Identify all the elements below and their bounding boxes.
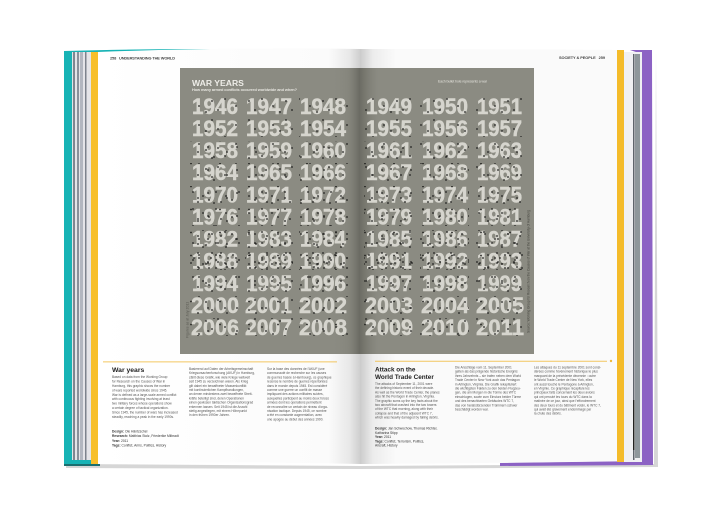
- text block: Attack French: [534, 366, 601, 416]
- text block: War years German: seit 1945 zu verzeichnen waren. Als Krieg: [189, 380, 248, 384]
- year numerals: 1995: [246, 271, 292, 296]
- text block: War years French: Sur la base des données de l'AKUF (une: [267, 367, 325, 371]
- text block: Attack English: The graphic sums up the key facts about the: [375, 399, 438, 403]
- year numerals: 1985: [366, 226, 412, 252]
- text block: Attack German: in Arlington, Virginia. Die Grafik rekapituliert: [455, 382, 517, 386]
- text block: Attack French: qui avait été gravement endommagé par: [534, 408, 592, 412]
- text block: War years German: erkennen lassen. Seit 1945 ist die Anzahl: [189, 405, 248, 409]
- text block: Attack heading: [375, 366, 434, 381]
- text block: War years French: comme une guerre un conflit de masse: [267, 388, 322, 392]
- year numerals: 1981: [477, 204, 522, 230]
- year numerals: 1948: [300, 94, 346, 119]
- text block: Attack French: ont aussi touché le Pentagone à Arlington,: [534, 382, 594, 386]
- poster title: WAR YEARS: [192, 78, 244, 88]
- year numerals: 1982: [192, 226, 238, 252]
- year numerals: 1949: [366, 94, 412, 119]
- text block: Attack German: und des benachbarten Gebäudes WTC 7,: [455, 399, 514, 403]
- text block: Attack English: As well as the World Trade Center, the planes: [375, 390, 440, 394]
- credits: War years: Year: 2011: [112, 439, 128, 443]
- text block: War years French: armées dont les opérations permettent: [267, 401, 322, 405]
- year numerals: 1998: [422, 271, 468, 296]
- year numerals: 1980: [422, 204, 468, 230]
- right cover edge (purple): [500, 50, 653, 466]
- text block: War years English: Since 1945, the number of wars has increased: [112, 410, 178, 414]
- year numerals: 1984: [300, 226, 346, 252]
- year numerals: 1954: [300, 116, 346, 141]
- text block: Attack English: [375, 382, 440, 420]
- year numerals: 1971: [246, 182, 292, 208]
- year numerals: 1967: [366, 160, 412, 185]
- text block: War years English: for Research on the Causes of War in: [112, 380, 165, 384]
- text block: War years English: War is defined as a large-scale armed conflict: [112, 393, 176, 397]
- text block: Attack German: Die Anschläge vom 11. September 2001: [455, 366, 512, 370]
- text block: Attack French: le World Trade Center de New York, elles: [534, 378, 593, 382]
- year numerals: 2007: [245, 315, 292, 340]
- year numerals: 1992: [422, 248, 468, 274]
- yellow page edge left: [91, 52, 98, 464]
- year numerals: 1956: [422, 116, 468, 141]
- year numerals: 1960: [300, 138, 346, 163]
- text block: War years French: recense le nombre de guerres répertoriées: [267, 380, 328, 384]
- text block: War years French: nisation tactique. Depuis 1945, ce nombre: [267, 409, 327, 413]
- year numerals: 1991: [366, 248, 412, 274]
- text block: Attack English: of the WTC that morning, along with their: [375, 407, 434, 411]
- text block: Attack German: einschlugen, sowie zum Einsturz beider Türme: [455, 395, 521, 399]
- text block: War years English: two military forces whose operations show: [112, 402, 172, 406]
- year numerals: 1989: [246, 248, 292, 274]
- left running head: 258 UNDERSTANDING THE WORLD: [110, 56, 175, 60]
- divider left: [103, 360, 337, 363]
- year numerals: 1958: [192, 138, 238, 163]
- text block: Attack French: la chute des débris.: [534, 412, 562, 416]
- year numerals: 1959: [246, 138, 292, 163]
- text block: War years English: steadily, reaching a peak in the early 1990s.: [112, 415, 174, 419]
- year numerals: 1962: [422, 138, 468, 163]
- text block: War years English: [112, 375, 178, 419]
- text block: War years French: impliquant des actions militaires suivies,: [267, 392, 324, 396]
- text block: Attack heading: World Trade Center: [375, 374, 434, 381]
- credits: Attack: Katharina Stipp: [375, 431, 398, 435]
- year numerals: 1957: [477, 116, 522, 141]
- text block: Attack French: marquant de la précédente décennie : outre: [534, 374, 596, 378]
- credits: Attack: Aircraft, History: [375, 444, 398, 448]
- year numerals: 1986: [422, 226, 468, 252]
- poster subtitle: How many armed conflicts occurred worldwide and when?: [192, 87, 298, 92]
- text block: Attack English: collapse and that of the adjacent WTC 7,: [375, 411, 433, 415]
- text block: War years English: of wars reported worldwide since 1945.: [112, 388, 167, 392]
- year numerals: 1965: [246, 160, 292, 185]
- year numerals: 1963: [477, 138, 522, 163]
- year numerals: 2006: [191, 315, 239, 340]
- year numerals: 1983: [246, 226, 292, 252]
- text block: War years French: [267, 367, 332, 421]
- text block: Attack English: also hit the Pentagon in Arlington, Virginia.: [375, 395, 435, 399]
- text block: Attack French: Les attaques du 11 septembre 2001 sont consi-: [534, 366, 601, 370]
- year numerals: 1988: [192, 248, 238, 274]
- year numerals: 1970: [192, 182, 238, 208]
- text block: War years French: de reconnaître un certain de niveau d'orga-: [267, 405, 328, 409]
- credits: War years: Tags: Conflict, Arms, Politics, History: [112, 444, 167, 448]
- source note: Source: Working Group for Research on the Causes of War at the University of Hamburg: [526, 210, 530, 333]
- text block: Attack English: the defining historic event of their decade.: [375, 386, 434, 390]
- text block: Attack English: The attacks of September 11, 2001 were: [375, 382, 433, 386]
- year numerals: 1973: [366, 182, 412, 208]
- year numerals: 1976: [192, 204, 238, 230]
- book shadow: [66, 52, 658, 469]
- year numerals: 1955: [366, 116, 412, 141]
- year numerals: 1997: [366, 271, 412, 296]
- year numerals: 1951: [477, 94, 522, 119]
- year numerals: 1964: [192, 160, 238, 185]
- text block: War years German: stetig angestiegen, mit einem Höhepunkt: [189, 409, 247, 413]
- text block: Attack English: which was heavily damaged by falling debris.: [375, 416, 439, 420]
- bullet holes: [190, 97, 525, 336]
- text block: Attack German: das von herabstürzenden Trümmern schwer: [455, 403, 518, 407]
- text block: Attack French: qui ont percuté les tours du WTC dans la: [534, 395, 592, 399]
- text block: War years German: kräfte beteiligt sind, deren Operationen: [189, 396, 244, 400]
- year numerals: [191, 94, 524, 340]
- right page stack: [624, 52, 642, 462]
- year numerals: 1947: [246, 94, 292, 119]
- legend note: Each bullet hole represents a war: [438, 80, 488, 84]
- right page: [360, 49, 618, 464]
- year numerals: 2003: [365, 293, 413, 318]
- text block: Attack German: die wichtigsten Fakten zu den beiden Flugzeu-: [455, 386, 521, 390]
- text block: War years German: [189, 367, 255, 417]
- year numerals: 1993: [477, 248, 522, 274]
- year numerals: 1975: [477, 182, 522, 208]
- text block: Attack French: principaux faits concernant les deux avions: [534, 391, 595, 395]
- credits: War years: Research: Matthias Stolz, Friederike Milbradt: [112, 434, 179, 438]
- year numerals: 1987: [477, 226, 522, 252]
- year numerals: 1999: [477, 271, 522, 296]
- year numerals: 2000: [191, 293, 239, 318]
- text block: War years German: einen gewissen taktischen Organisationsgrad: [189, 401, 253, 405]
- text block: War years German: mit kontinuierlichen Kampfhandlungen,: [189, 388, 244, 392]
- right running head: SOCIETY & PEOPLE 259: [559, 55, 606, 60]
- year numerals: 2004: [421, 293, 469, 318]
- text block: War years French: une apogée au début des années 1990.: [267, 417, 323, 421]
- text block: Attack German: ihres Jahrzehnts – sie trafen neben dem World: [455, 374, 521, 378]
- text block: War years German: Basierend auf Daten der Arbeitsgemeinschaft: [189, 367, 253, 371]
- text block: Attack German: gelten als das prägende historische Ereignis: [455, 370, 518, 374]
- left page stack: [72, 52, 91, 460]
- text block: War years German: gilt dabei ein bewaffneter Massenkonflikt: [189, 384, 246, 388]
- text block: War years English: with continuous fighting involving at least: [112, 397, 170, 401]
- year numerals: 1968: [422, 160, 468, 185]
- text block: War years French: dans le monde depuis 1945. Est considéré: [267, 384, 327, 388]
- yellow page edge right: [617, 50, 624, 462]
- year numerals: 1953: [246, 116, 292, 141]
- year numerals: 2001: [245, 293, 292, 318]
- year numerals: 1966: [300, 160, 346, 185]
- panel: war years poster: [180, 68, 534, 354]
- text block: War years English: Hamburg, this graphic shows the number: [112, 384, 171, 388]
- credits: Attack: Year: 2011: [375, 435, 391, 439]
- credits: Attack: [375, 426, 438, 448]
- year numerals: 1977: [246, 204, 292, 230]
- text block: War years French: auxquelles participent au moins deux forces: [267, 396, 329, 400]
- year numerals: 2002: [299, 293, 347, 318]
- left page: [97, 48, 360, 464]
- year numerals: 1974: [422, 182, 468, 208]
- year numerals: 1990: [300, 248, 346, 274]
- year numerals: 2010: [421, 315, 469, 340]
- year numerals: 1961: [366, 138, 412, 163]
- year numerals: 1946: [192, 94, 238, 119]
- credits: War years: [112, 430, 179, 448]
- year numerals: 1972: [300, 182, 346, 208]
- credits: Attack: Design: Jan Schwochow, Thomas Richter,: [375, 426, 438, 430]
- text block: Attack French: matinée de ce jour, ainsi que l'effondrement: [534, 399, 596, 403]
- text block: War years German: zählt diese Grafik, wie viele Kriege weltweit: [189, 375, 250, 379]
- text block: Attack German: gen, die am Morgen in die Türme des WTC: [455, 391, 517, 395]
- text block: War years German: in den frühen 1990er Jahren.: [189, 413, 230, 417]
- year numerals: 1952: [192, 116, 238, 141]
- text block: War years French: communauté de recherche sur les causes: [267, 371, 327, 375]
- credits: Attack: Tags: Conflict, Terrorism, Politics,: [375, 439, 424, 443]
- text block: Attack English: two aircraft that crashed into the two towers: [375, 403, 437, 407]
- text block: War years English: Based on data from the Working Group: [112, 375, 168, 379]
- text block: War years heading: War years: [112, 367, 144, 374]
- year numerals: 1950: [422, 94, 468, 119]
- text block: Attack French: dérées comme l'événement historique le plus: [534, 370, 598, 374]
- year numerals: 2005: [476, 293, 524, 318]
- divider right: [375, 360, 612, 362]
- text block: Attack German: Trade Center in New York auch das Pentagon: [455, 378, 520, 382]
- text block: Attack French: des deux tours et du bâtiment voisin, le WTC 7,: [534, 403, 601, 407]
- date note: Figures as at July 2011: [186, 302, 190, 338]
- year numerals: 1979: [366, 204, 412, 230]
- text block: War years French: de guerres basée à Hambourg), ce graphique: [267, 375, 332, 379]
- year numerals: 1994: [192, 271, 238, 296]
- left cover edge (teal): [64, 49, 210, 466]
- credits: War years: Design: Ole Häntzschel: [112, 430, 148, 434]
- text block: War years German: Kriegsursachenforschung (AKUF) in Hamburg,: [189, 371, 255, 375]
- year numerals: 1978: [300, 204, 346, 230]
- text block: Attack heading: Attack on the: [375, 366, 416, 374]
- text block: Attack German: beschädigt worden war.: [455, 408, 489, 412]
- year numerals: 1969: [477, 160, 522, 185]
- text block: Attack French: en Virginie. Ce graphique récapitule les: [534, 386, 590, 390]
- year numerals: 2009: [365, 315, 413, 340]
- year numerals: 1996: [300, 271, 346, 296]
- year numerals: 2011: [476, 315, 524, 340]
- year numerals: 2008: [299, 315, 347, 340]
- text block: War years French: a été en constante augmentation, avec: [267, 413, 322, 417]
- text block: War years English: a certain degree of tactical organization.: [112, 406, 169, 410]
- text block: War years German: an denen mindestens zwei bewaffnete Streit-: [189, 392, 253, 396]
- text block: Attack German: [455, 366, 521, 412]
